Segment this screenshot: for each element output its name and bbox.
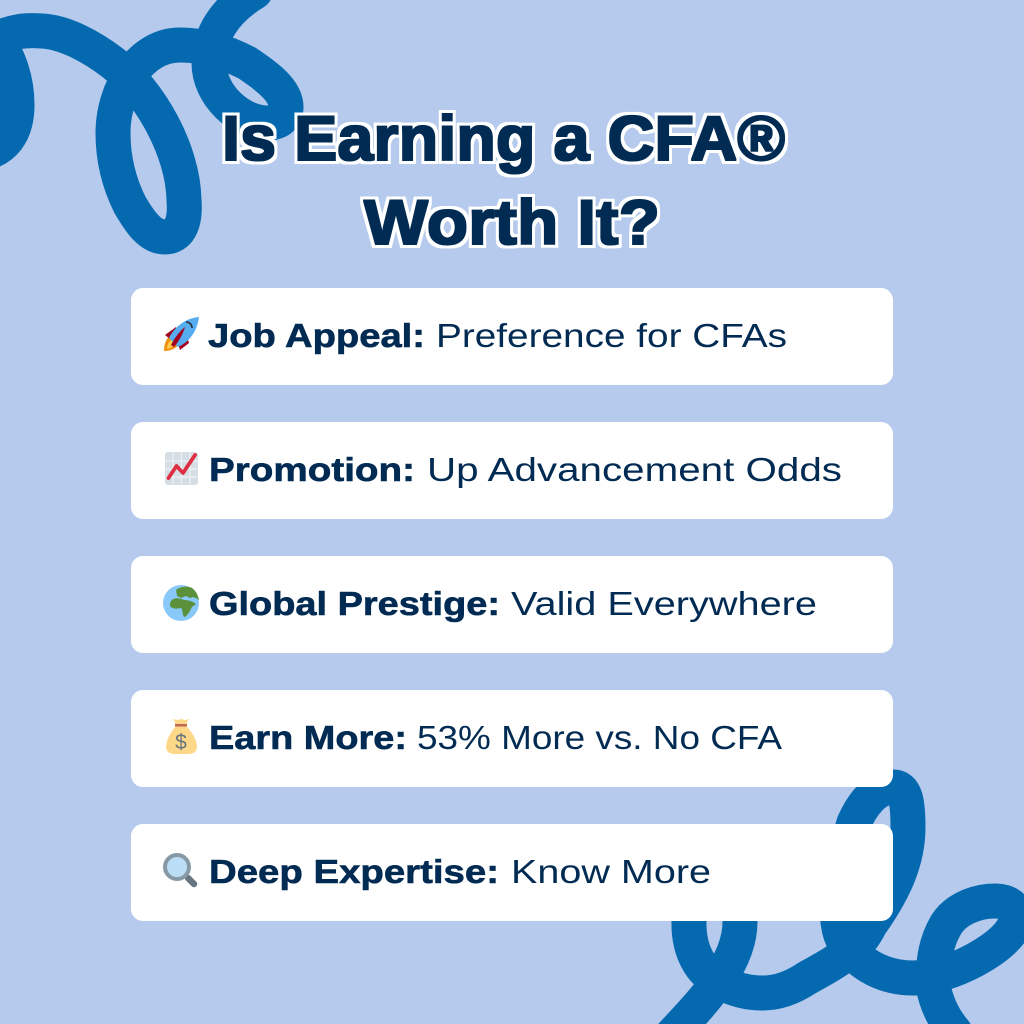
panel: job appeal [131,288,893,385]
panel: promotion [131,422,893,519]
text: preference for CFAs: Preference for CFAs [436,317,787,354]
icon: rocket [164,317,199,351]
icon: money bag [166,719,197,754]
decorative squiggle: top left [0,0,286,237]
text: know more: Know More [511,853,711,890]
label: earn more: Earn More: [209,719,407,756]
text: valid everywhere: Valid Everywhere [511,585,817,622]
label: job appeal: Job Appeal: [208,317,425,354]
icon: money bag: $ [175,731,187,754]
decorative squiggle: bottom right [670,787,1016,1024]
text: up advancement odds: Up Advancement Odds [427,451,842,488]
icon: rising chart [165,452,198,485]
panel: earn more [131,690,893,787]
icon: globe [163,585,199,621]
title: Is Earning a CFA® [222,104,785,174]
panel: global prestige [131,556,893,653]
title: Worth It? [364,188,660,258]
icon: magnifying glass [165,855,194,884]
panel: deep expertise [131,824,893,921]
label: global prestige: Global Prestige: [209,585,500,622]
label: promotion: Promotion: [209,451,415,488]
title [222,104,785,258]
label: deep expertise: Deep Expertise: [209,853,499,890]
text: 53% more vs no CFA: 53% More vs. No CFA [417,719,782,756]
